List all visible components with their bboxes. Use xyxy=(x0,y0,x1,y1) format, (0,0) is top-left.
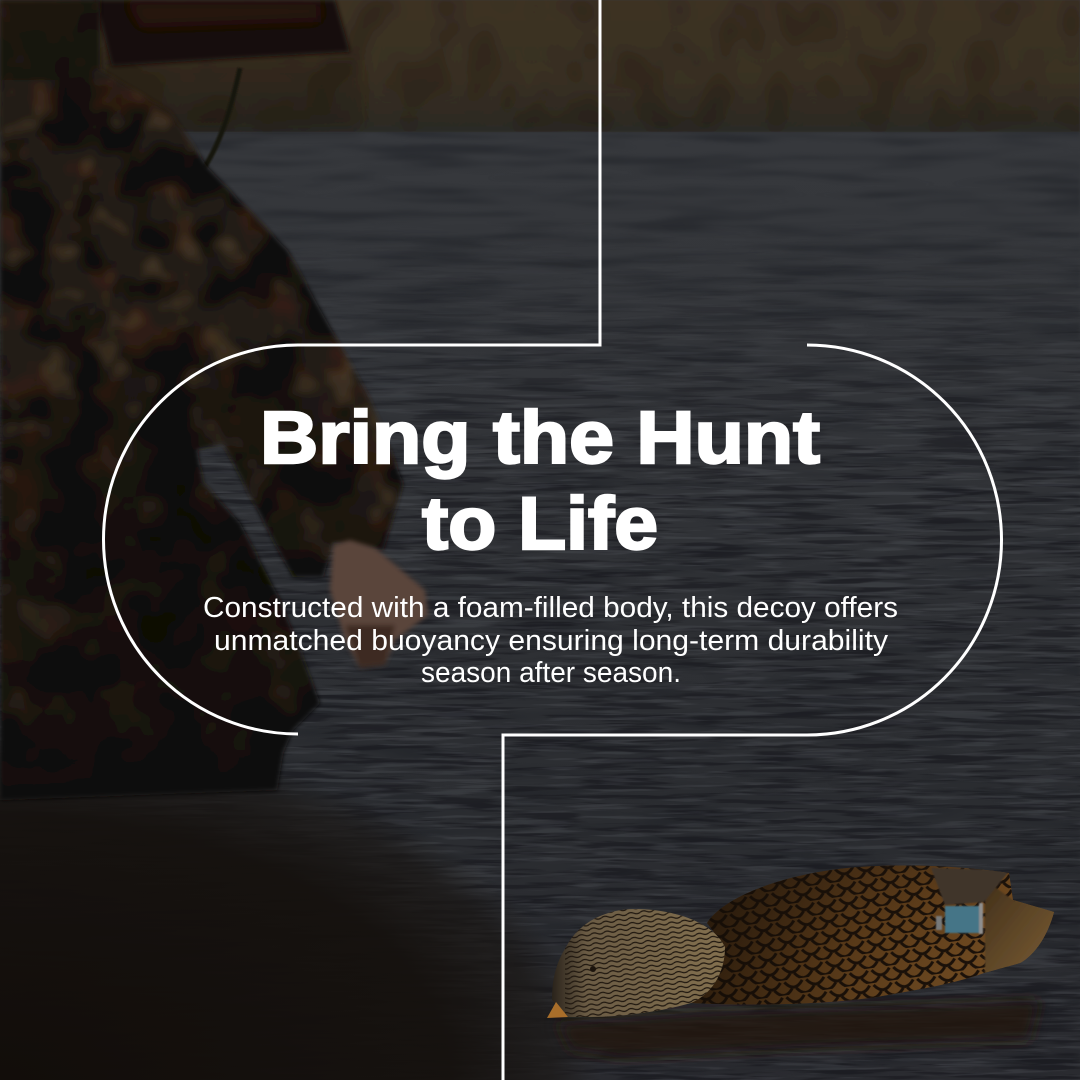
duck body xyxy=(692,866,1054,1004)
description text: season after season. xyxy=(421,657,681,689)
description text xyxy=(203,592,898,689)
hunter hand xyxy=(330,540,428,668)
duck pale wing patch xyxy=(931,868,1010,905)
duck reflection xyxy=(556,1000,1040,1058)
background: dark foreground water at bottom left xyxy=(0,730,600,1080)
gun sling strap xyxy=(204,68,240,168)
description text: unmatched buoyancy ensuring long-term durability xyxy=(214,625,889,657)
duck wing speculum xyxy=(936,903,983,934)
description text: Constructed with a foam-filled body, this decoy offers xyxy=(203,592,898,624)
background: far grass bank xyxy=(0,0,1080,132)
frame line: right pill and bottom xyxy=(503,345,1002,1080)
duck head xyxy=(552,909,725,1017)
title: Bring the Hunt xyxy=(260,396,820,479)
duck tail xyxy=(984,888,1054,973)
title xyxy=(260,396,820,565)
frame line: top and left pill xyxy=(104,0,600,734)
hunter in camouflage xyxy=(0,0,420,810)
duck bill xyxy=(547,1002,568,1018)
hunter gun stock xyxy=(95,0,350,66)
title: to Life xyxy=(422,482,658,565)
duck decoy xyxy=(545,860,1060,1058)
